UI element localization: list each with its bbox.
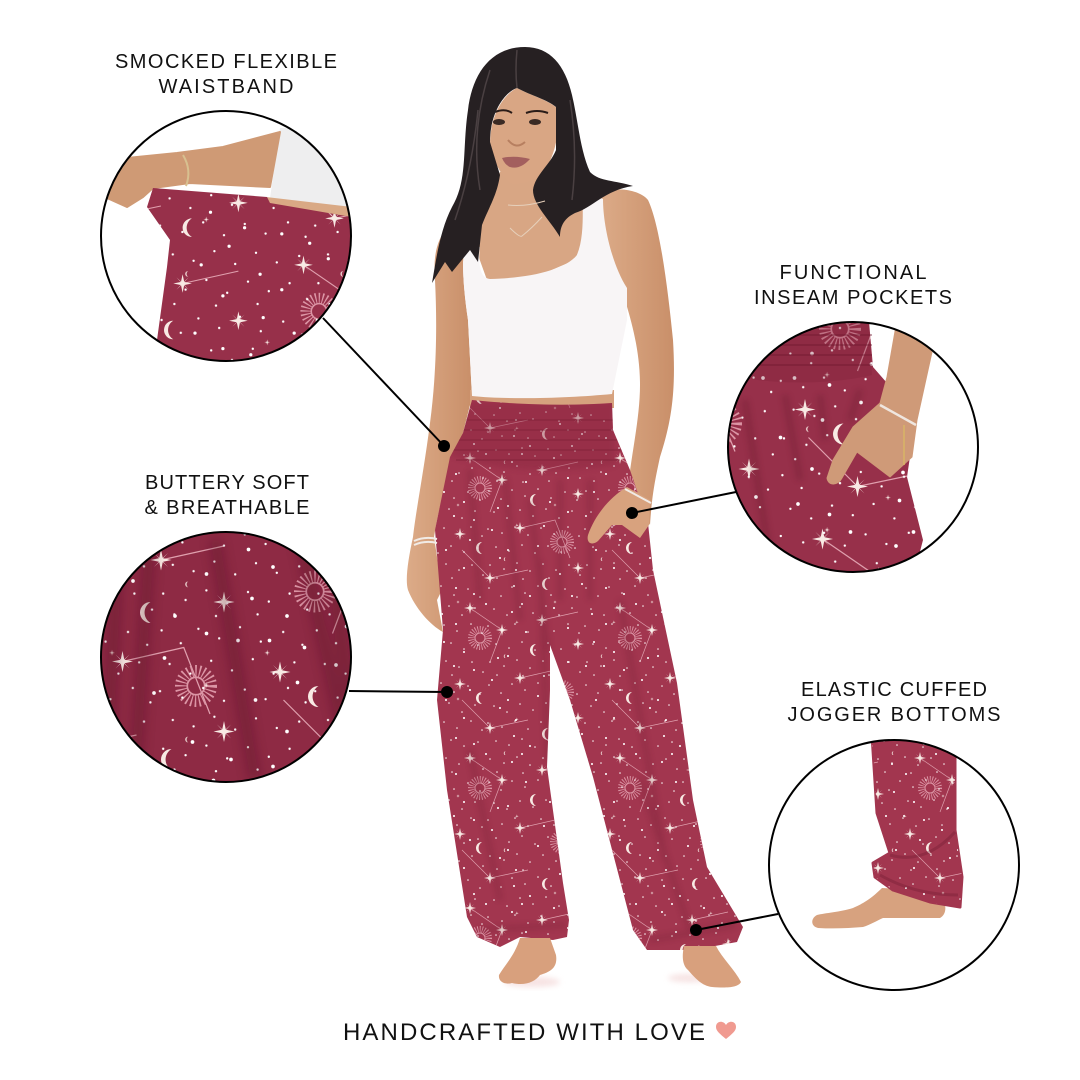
hair [432, 47, 633, 283]
model figure [407, 47, 743, 987]
heading: functional inseam pockets [754, 262, 952, 309]
heading: smocked flexible waistband: WAISTBAND [158, 76, 294, 98]
pants [435, 400, 743, 950]
right hand in pocket [588, 487, 650, 543]
arm and fist [90, 132, 280, 207]
heading: smocked flexible waistband: SMOCKED FLEXIBLE [115, 51, 337, 73]
smocking shade [752, 323, 872, 382]
midriff [470, 390, 614, 408]
pointer: waistband [323, 318, 450, 452]
forearm and hand [827, 320, 932, 484]
pointer: fabric [349, 686, 453, 698]
pointer: pockets [626, 492, 736, 519]
icon: heart [716, 1022, 736, 1039]
circle: pocket detail [727, 321, 979, 573]
heading: functional inseam pockets: FUNCTIONAL [780, 262, 926, 284]
circle: waistband detail [90, 111, 360, 370]
heading: buttery soft and breathable: BUTTERY SOFT [145, 472, 309, 494]
pants cuff [872, 735, 962, 907]
fabric folds [108, 535, 350, 780]
heading: elastic cuffed jogger bottoms [788, 679, 1000, 726]
feet [499, 938, 741, 987]
heading: functional inseam pockets: INSEAM POCKETS [754, 287, 952, 309]
circle: fabric close-up [100, 530, 355, 785]
left arm [407, 228, 472, 632]
pant folds and smocking shade [450, 402, 735, 940]
callout lines and dots [323, 318, 778, 936]
heading: buttery soft and breathable: & BREATHABLE [144, 497, 310, 519]
white shirt [270, 128, 346, 206]
right arm [600, 190, 674, 525]
pants waistband [147, 188, 352, 370]
necklace [508, 201, 545, 236]
face [490, 88, 558, 184]
heading: buttery soft and breathable [144, 472, 310, 519]
pointer: cuffs [690, 914, 778, 936]
tagline: HANDCRAFTED WITH LOVE [343, 1019, 705, 1046]
pants [729, 323, 923, 571]
heading: elastic cuffed jogger bottoms: ELASTIC CUFFED [801, 679, 987, 701]
circle: cuff detail [769, 735, 1019, 990]
midriff [267, 197, 348, 216]
neck and chest [466, 172, 588, 280]
bracelet [880, 405, 916, 425]
bracelets [414, 489, 651, 545]
foot shadows [504, 974, 712, 987]
heading: elastic cuffed jogger bottoms: JOGGER BOTTOMS [788, 704, 1000, 726]
white tank top [463, 190, 627, 398]
foot [812, 888, 945, 928]
heading: smocked flexible waistband [115, 51, 337, 98]
bracelet [183, 155, 188, 186]
